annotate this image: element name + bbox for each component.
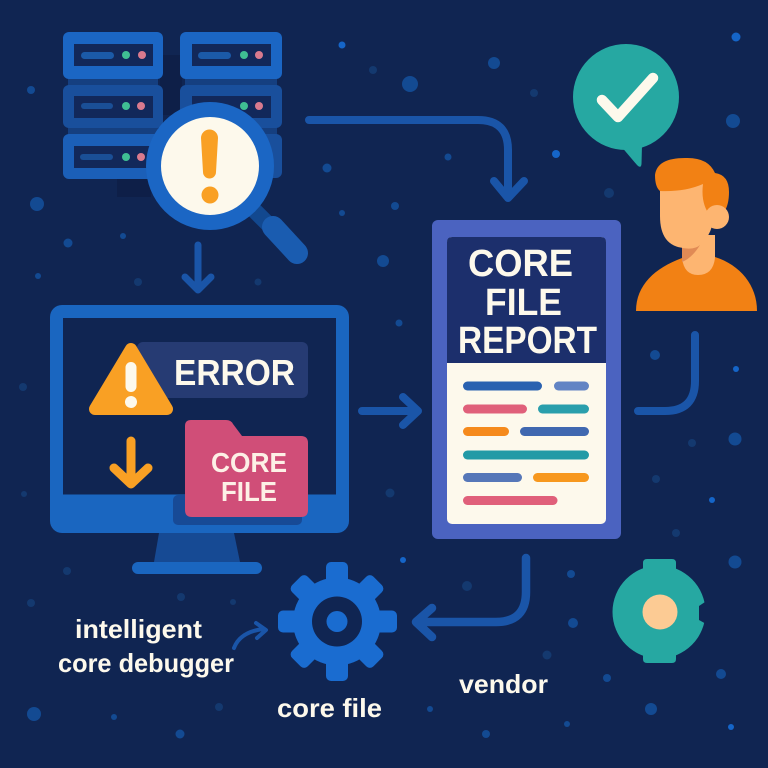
label: intelligent core debugger: [58, 614, 234, 678]
connector: person to report: [638, 335, 695, 411]
label: core file: core file: [277, 693, 382, 723]
error banner: ERROR: [174, 352, 295, 393]
label: intelligent core debugger: core debugger: [58, 648, 234, 678]
server rack: left: [63, 32, 163, 179]
arrow: monitor to report: [362, 397, 418, 425]
gear icon: core file: [278, 562, 397, 681]
person avatar: [636, 158, 757, 311]
label: vendor: vendor: [459, 669, 548, 699]
error banner: [137, 342, 308, 398]
arrow: orange down: [114, 441, 148, 484]
warning triangle icon: [95, 349, 167, 409]
arrow: magnifier to monitor: [185, 245, 211, 290]
teal gear icon: [612, 559, 708, 663]
magnifying glass alert icon: [154, 110, 297, 253]
arrow: debugger to gear: [234, 623, 266, 648]
arrow: servers to report: [309, 120, 524, 198]
core file report document: CORE: [468, 243, 573, 285]
core file folder: [185, 420, 308, 517]
core file report document: REPORT: [458, 320, 597, 362]
core file folder: FILE: [221, 476, 277, 507]
core file report document: [432, 220, 621, 539]
monitor: [50, 305, 349, 574]
core file report document: FILE: [485, 282, 562, 324]
arrow: report to gear: [416, 558, 526, 637]
speech bubble check icon: [573, 44, 679, 167]
core file folder: CORE: [211, 447, 287, 478]
server rack: right: [180, 32, 282, 178]
label: intelligent core debugger: intelligent: [75, 614, 202, 644]
